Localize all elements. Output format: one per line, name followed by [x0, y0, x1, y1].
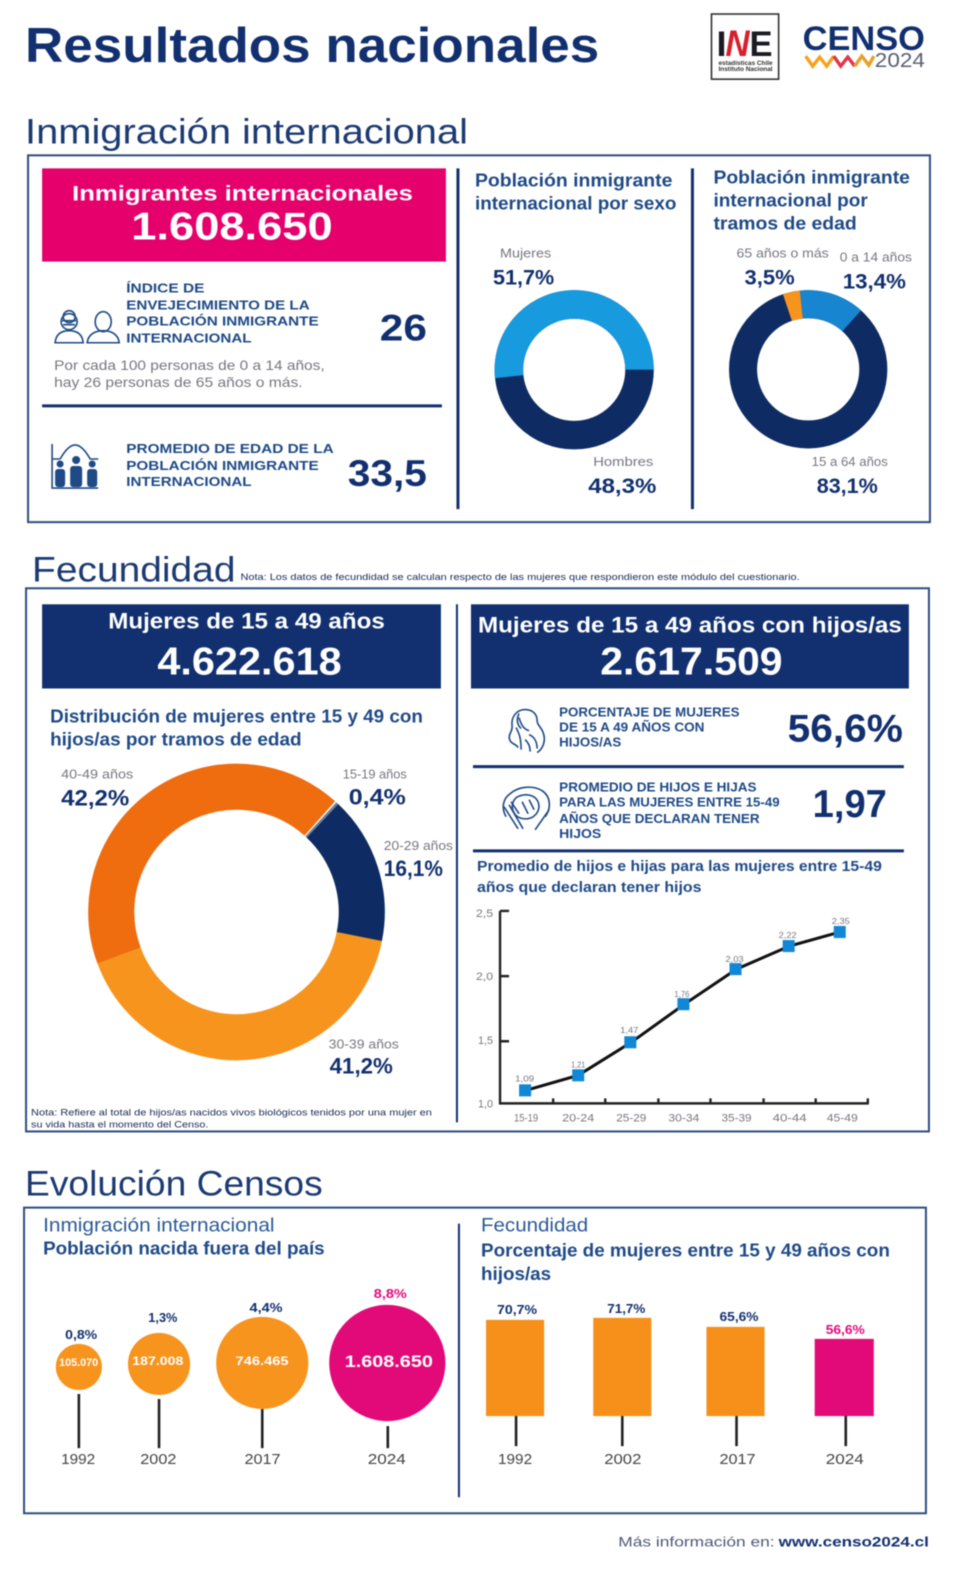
- bar chart: porcentaje de mujeres con hijos: 65,6%: [719, 1309, 759, 1324]
- logo: INE: I: [716, 25, 727, 64]
- text: índice de envejecimiento: POBLACIÓN INMIGRANTE: [126, 314, 319, 329]
- labels: distribución por edad: 0,4%: [349, 785, 406, 810]
- line chart: promedio de hijos por edad: 40-44: [773, 1112, 807, 1124]
- labels: distribución por edad: 42,2%: [61, 786, 130, 811]
- heading: gráfico de línea: años que declaran tener hijos: [477, 879, 701, 896]
- text: porcentaje de mujeres: [559, 705, 740, 750]
- number: índice: 26: [380, 307, 427, 349]
- icon: personas mayores: [55, 311, 119, 343]
- bubble chart: población nacida fuera del país: 746.465: [235, 1354, 289, 1368]
- logo: Censo 2024: CENSO: [803, 20, 925, 58]
- heading: Fecundidad: Fecundidad: [32, 550, 235, 589]
- text: porcentaje de mujeres: PORCENTAJE DE MUJERES: [559, 705, 740, 720]
- heading: distribución: hijos/as por tramos de edad: [50, 730, 302, 750]
- bar chart: porcentaje de mujeres con hijos: 71,7%: [607, 1301, 646, 1316]
- text: promedio de hijos: HIJOS: [559, 826, 602, 841]
- panel: inmigración internacional: [28, 155, 930, 522]
- line chart: promedio de hijos por edad: 35-39: [722, 1112, 752, 1124]
- callout: inmigrantes internacionales: [42, 168, 446, 262]
- text: índice de envejecimiento: ENVEJECIMIENTO DE LA: [126, 298, 310, 313]
- bar chart: porcentaje de mujeres con hijos: 1992: [498, 1451, 532, 1468]
- heading: población nacida fuera del país: Población nacida fuera del país: [43, 1239, 325, 1259]
- labels: distribución por edad: 41,2%: [330, 1053, 393, 1078]
- line chart: promedio de hijos por edad: 1,0: [478, 1098, 493, 1110]
- heading: por sexo: [475, 170, 676, 213]
- labels: distribución por edad: 40-49 años: [61, 767, 134, 782]
- line chart: promedio de hijos por edad: 20-24: [562, 1112, 594, 1124]
- labels: tramos de edad: 0 a 14 años: [840, 250, 912, 265]
- heading: porcentaje de mujeres con hijos: [481, 1216, 890, 1284]
- line chart: promedio de hijos por edad: 2,5: [476, 908, 493, 920]
- labels: sexo: Hombres: [593, 454, 654, 469]
- labels: sexo: 51,7%: [493, 267, 554, 290]
- bar chart: porcentaje de mujeres con hijos: 2002: [604, 1451, 641, 1468]
- heading: por sexo: Población inmigrante: [475, 170, 672, 190]
- callout: inmigrantes internacionales: Inmigrantes internacionales: [72, 182, 413, 205]
- line chart: promedio de hijos por edad: 1,09: [515, 1074, 535, 1083]
- bubble chart: población nacida fuera del país: 2002: [140, 1451, 176, 1468]
- line chart: promedio de hijos por edad: 1,5: [478, 1035, 493, 1047]
- labels: distribución por edad: 20-29 años: [384, 838, 453, 853]
- heading: por sexo: internacional por sexo: [475, 193, 676, 213]
- line chart: promedio de hijos por edad: 1,47: [620, 1026, 639, 1035]
- labels: tramos de edad: 83,1%: [817, 475, 878, 498]
- labels: tramos de edad: 13,4%: [843, 271, 906, 294]
- bar chart: porcentaje de mujeres con hijos: 56,6%: [826, 1322, 865, 1337]
- icon: madre e hijo: [503, 787, 549, 830]
- text: índice de envejecimiento: ÍNDICE DE: [126, 281, 205, 296]
- labels: sexo: [493, 246, 657, 498]
- callout: mujeres de 15 a 49 años: 4.622.618: [157, 640, 342, 683]
- text: promedio de edad: INTERNACIONAL: [126, 474, 252, 489]
- labels: tramos de edad: 65 años o más: [737, 246, 829, 261]
- logo: INE: estadísticas Chile: [718, 61, 773, 67]
- labels: distribución por edad: 30-39 años: [329, 1036, 399, 1051]
- text: explicación índice: [54, 357, 325, 390]
- heading: porcentaje de mujeres con hijos: Porcentaje de mujeres entre 15 y 49 años con: [481, 1241, 890, 1261]
- heading: por tramos de edad: internacional por: [713, 190, 868, 210]
- text: promedio de edad: POBLACIÓN INMIGRANTE: [126, 458, 319, 473]
- callout: mujeres con hijos: Mujeres de 15 a 49 años con hijos/as: [478, 612, 902, 637]
- footer: www.censo2024.cl: [777, 1533, 929, 1549]
- heading: por tramos de edad: Población inmigrante: [713, 167, 910, 187]
- panel: fecundidad: [26, 588, 929, 1131]
- text: promedio de hijos: [559, 780, 780, 841]
- logo: INE: E: [750, 25, 773, 64]
- line chart: promedio de hijos por edad: 15-19: [514, 1112, 538, 1124]
- icon: mujer: [509, 710, 544, 753]
- footer: Más información en:: [618, 1533, 775, 1549]
- line chart: promedio de hijos por edad: 1,21: [571, 1060, 586, 1069]
- heading: porcentaje de mujeres con hijos: hijos/as: [481, 1264, 551, 1284]
- line chart: promedio de hijos por edad: [476, 908, 869, 1124]
- heading: población nacida fuera del país: Inmigración internacional: [43, 1216, 275, 1237]
- heading: población nacida fuera del país: [43, 1216, 325, 1259]
- text: promedio de hijos: PROMEDIO DE HIJOS E HIJAS: [559, 780, 757, 795]
- title: Resultados nacionales: [25, 19, 599, 73]
- heading: gráfico de línea: [477, 858, 882, 896]
- note: fecundidad: Nota: Los datos de fecundidad se calculan respecto de las mujeres que respondieron este módulo del cuestionario.: [241, 572, 800, 582]
- labels: sexo: 48,3%: [588, 475, 657, 498]
- labels: tramos de edad: 3,5%: [745, 267, 795, 290]
- number: promedio de edad: 33,5: [348, 452, 427, 494]
- callout: mujeres con hijos: 2.617.509: [600, 640, 783, 683]
- icon: grupo de personas: [52, 444, 98, 488]
- bubble chart: población nacida fuera del país: [56, 1286, 445, 1468]
- text: índice de envejecimiento: [126, 281, 319, 346]
- note: hijos nacidos vivos: su vida hasta el momento del Censo.: [31, 1119, 208, 1129]
- bubble chart: población nacida fuera del país: 4,4%: [250, 1300, 283, 1315]
- logo: INE: Instituto Nacional: [718, 67, 773, 73]
- line chart: promedio de hijos por edad: 30-34: [668, 1112, 699, 1124]
- bubble chart: población nacida fuera del país: 0,8%: [65, 1327, 98, 1342]
- line chart: promedio de hijos por edad: 25-29: [616, 1112, 646, 1124]
- labels: distribución por edad: [61, 767, 453, 1078]
- logo: INE: N: [726, 22, 751, 64]
- heading: porcentaje de mujeres con hijos: Fecundidad: [481, 1216, 588, 1237]
- heading: por tramos de edad: tramos de edad: [713, 213, 857, 233]
- heading: gráfico de línea: Promedio de hijos e hijas para las mujeres entre 15-49: [477, 858, 882, 875]
- text: promedio de edad: [126, 441, 334, 489]
- callout: inmigrantes internacionales: 1.608.650: [131, 206, 333, 249]
- footer: [618, 1533, 929, 1549]
- callout: mujeres de 15 a 49 años: Mujeres de 15 a 49 años: [108, 608, 385, 633]
- bubble chart: población nacida fuera del país: 1992: [61, 1451, 95, 1468]
- text: promedio de hijos: AÑOS QUE DECLARAN TENER: [559, 811, 760, 826]
- text: promedio de edad: PROMEDIO DE EDAD DE LA: [126, 441, 334, 456]
- heading: distribución: Distribución de mujeres entre 15 y 49 con: [50, 707, 423, 727]
- bubble chart: población nacida fuera del país: 1.608.650: [345, 1352, 433, 1371]
- donut chart: tramos de edad: [726, 287, 891, 452]
- note: hijos nacidos vivos: [31, 1107, 432, 1129]
- donut chart: sexo: [502, 298, 646, 442]
- labels: tramos de edad: 15 a 64 años: [812, 454, 888, 469]
- bubble chart: población nacida fuera del país: 2024: [368, 1451, 406, 1468]
- bubble chart: población nacida fuera del país: 187.008: [132, 1354, 184, 1368]
- text: índice de envejecimiento: INTERNACIONAL: [126, 331, 252, 346]
- logo: INE: [711, 14, 779, 79]
- donut chart: distribución por edad: [59, 735, 414, 1089]
- text: promedio de hijos: PARA LAS MUJERES ENTRE 15-49: [559, 795, 780, 810]
- labels: distribución por edad: 16,1%: [384, 856, 443, 881]
- heading: distribución: [50, 707, 423, 750]
- heading: Evolución Censos: Evolución Censos: [25, 1165, 323, 1204]
- note: hijos nacidos vivos: Nota: Refiere al total de hijos/as nacidos vivos biológicos tenidos por una mujer en: [31, 1107, 432, 1117]
- line chart: promedio de hijos por edad: 2,35: [832, 917, 850, 926]
- text: explicación índice: hay 26 personas de 65 años o más.: [54, 374, 303, 390]
- labels: sexo: Mujeres: [500, 246, 552, 261]
- number: porcentaje: 56,6%: [788, 708, 903, 751]
- text: porcentaje de mujeres: DE 15 A 49 AÑOS CON: [559, 720, 704, 735]
- bar chart: porcentaje de mujeres con hijos: [486, 1301, 874, 1468]
- callout: mujeres con hijos: [471, 604, 909, 688]
- bubble chart: población nacida fuera del país: 2017: [245, 1451, 281, 1468]
- labels: distribución por edad: 15-19 años: [343, 767, 407, 782]
- number: promedio de hijos: 1,97: [813, 783, 887, 826]
- line chart: promedio de hijos por edad: 2,0: [476, 971, 493, 983]
- bar chart: porcentaje de mujeres con hijos: 2017: [719, 1451, 756, 1468]
- text: porcentaje de mujeres: HIJOS/AS: [559, 735, 622, 750]
- line chart: promedio de hijos por edad: 1,76: [674, 990, 690, 999]
- panel: evolución censos: [24, 1208, 926, 1513]
- logo: Censo 2024: 2024: [875, 50, 925, 72]
- text: explicación índice: Por cada 100 personas de 0 a 14 años,: [54, 357, 325, 373]
- line chart: promedio de hijos por edad: 2,03: [726, 955, 744, 964]
- callout: mujeres de 15 a 49 años: [42, 604, 441, 688]
- heading: por tramos de edad: [713, 167, 910, 233]
- labels: tramos de edad: [737, 246, 912, 498]
- line chart: promedio de hijos por edad: 2,22: [779, 931, 797, 940]
- bar chart: porcentaje de mujeres con hijos: 70,7%: [497, 1302, 538, 1317]
- bar chart: porcentaje de mujeres con hijos: 2024: [826, 1451, 864, 1468]
- heading: Inmigración internacional: Inmigración internacional: [25, 112, 468, 151]
- bubble chart: población nacida fuera del país: 105.070: [59, 1357, 98, 1369]
- bubble chart: población nacida fuera del país: 1,3%: [148, 1310, 178, 1325]
- line chart: promedio de hijos por edad: 45-49: [827, 1112, 858, 1124]
- bubble chart: población nacida fuera del país: 8,8%: [374, 1286, 407, 1301]
